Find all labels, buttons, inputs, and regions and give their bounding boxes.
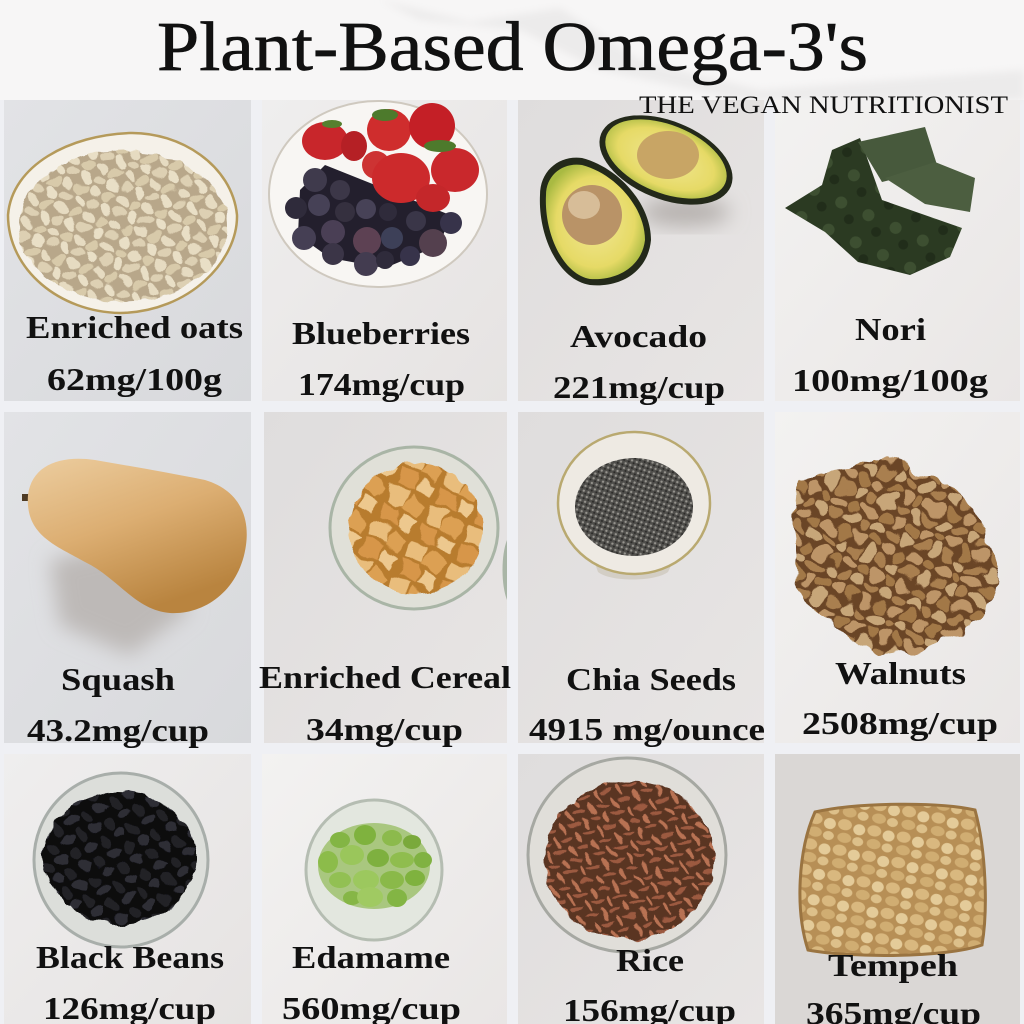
- panel: black beans: [4, 754, 251, 1024]
- icon: butternut squash: [22, 459, 247, 655]
- label: tempeh: Tempeh: [828, 947, 958, 983]
- value: chia seeds: 4915 mg/ounce: [529, 711, 765, 747]
- panel: tempeh: [775, 754, 1020, 1024]
- icon: walnut pile: [792, 456, 998, 655]
- label: nori: Nori: [855, 311, 926, 347]
- title: Plant-Based Omega-3's: [157, 9, 868, 86]
- label: black beans: Black Beans: [36, 939, 224, 975]
- icon: tempeh block: [800, 804, 985, 955]
- panel: walnuts: [775, 412, 1020, 743]
- panel: nori: [775, 100, 1020, 401]
- subtitle: THE VEGAN NUTRITIONIST: [639, 92, 1008, 119]
- panel: chia seeds: [518, 412, 765, 747]
- label: avocado: Avocado: [570, 318, 707, 354]
- icon: nori sheets: [785, 127, 975, 275]
- value: blueberries: 174mg/cup: [298, 366, 465, 402]
- value: nori: 100mg/100g: [792, 362, 988, 398]
- label: walnuts: Walnuts: [835, 655, 966, 691]
- label: chia seeds: Chia Seeds: [566, 661, 736, 697]
- panel: avocado: [518, 98, 764, 405]
- value: avocado: 221mg/cup: [553, 369, 725, 405]
- label: enriched cereal: Enriched Cereal: [259, 659, 511, 695]
- panel: edamame: [262, 754, 507, 1024]
- value: enriched cereal: 34mg/cup: [306, 711, 463, 747]
- label: edamame: Edamame: [292, 939, 450, 975]
- panel: enriched cereal: [259, 412, 511, 747]
- label: squash: Squash: [61, 661, 175, 697]
- label: enriched oats: Enriched oats: [26, 309, 243, 345]
- marble title band: [0, 0, 1024, 100]
- icon: jar of black beans: [34, 773, 208, 947]
- value: squash: 43.2mg/cup: [27, 712, 209, 748]
- icon: avocado halves: [540, 98, 746, 285]
- label: rice: Rice: [616, 942, 684, 978]
- icon: jar of edamame: [306, 800, 442, 940]
- panel: enriched oats: [4, 100, 251, 401]
- icon: jar of rice: [528, 758, 726, 952]
- label: blueberries: Blueberries: [292, 315, 470, 351]
- value: walnuts: 2508mg/cup: [802, 705, 998, 741]
- icon: jar of cereal: [330, 447, 507, 609]
- icon: bowl of oats: [8, 133, 237, 313]
- panel: squash: [4, 412, 251, 748]
- icon: bowl of chia seeds: [558, 432, 710, 580]
- icon: bowl of berries: [269, 101, 487, 287]
- value: enriched oats: 62mg/100g: [47, 361, 222, 397]
- panel: rice: [518, 754, 764, 1024]
- panel: blueberries: [262, 100, 507, 402]
